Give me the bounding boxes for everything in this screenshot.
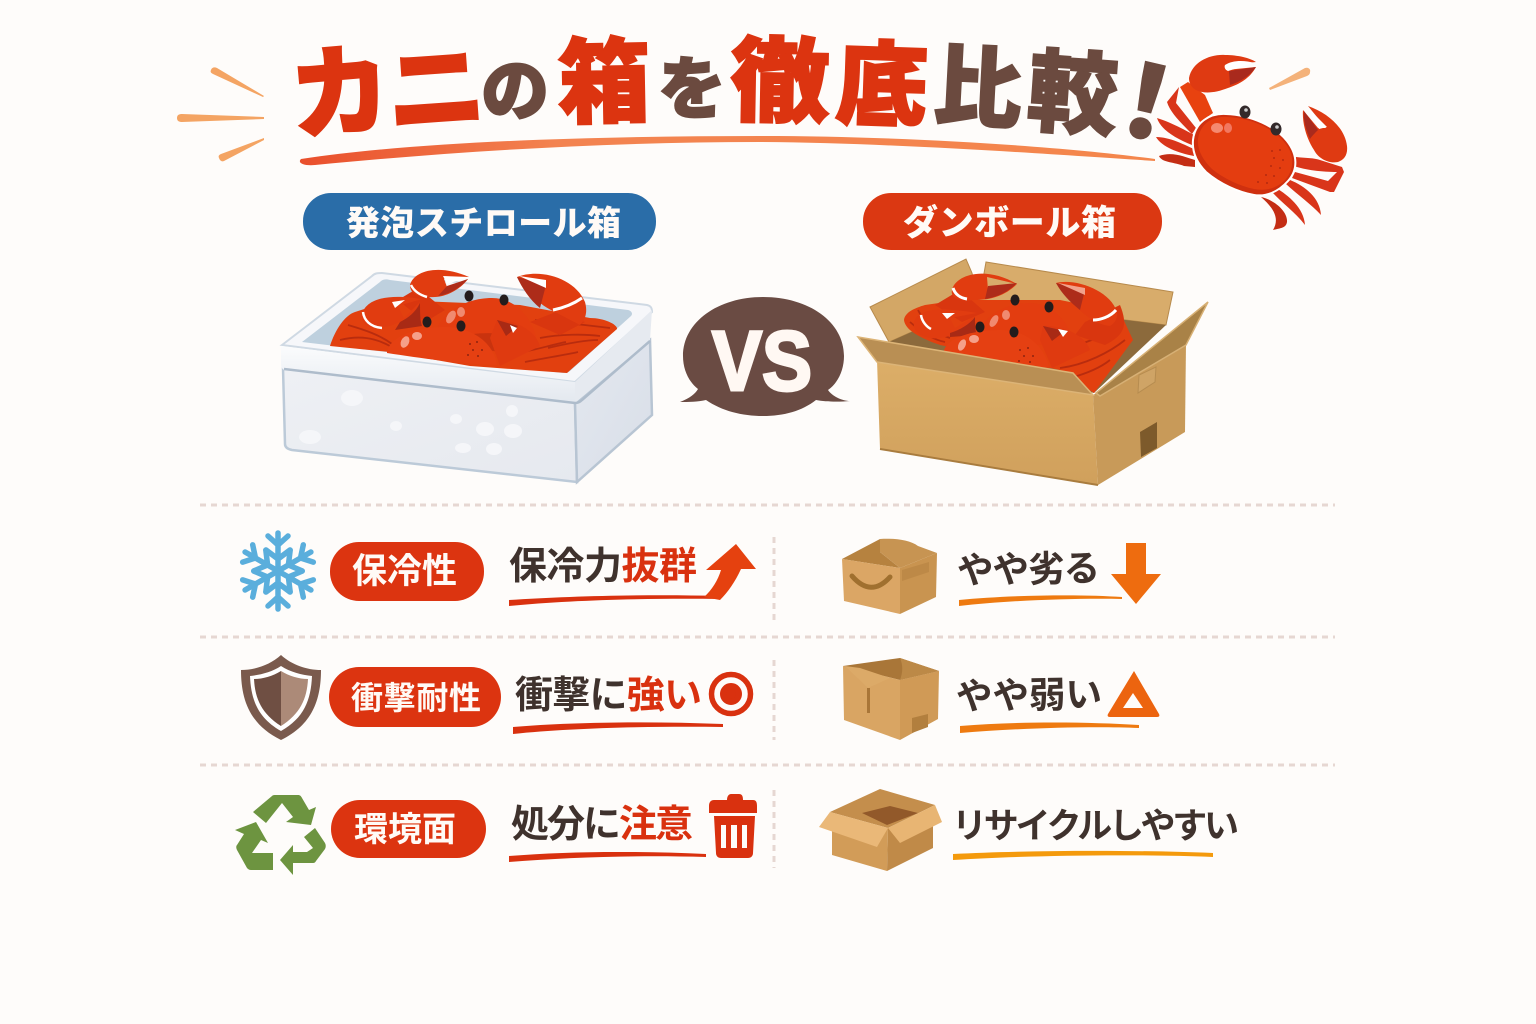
back crab [433, 290, 537, 352]
result: foam environment [509, 804, 706, 862]
result: foam cold retention: 保冷力抜群 [509, 546, 697, 588]
label pill: environment [331, 800, 486, 858]
title underline swoosh [300, 136, 1155, 165]
title: を [658, 52, 726, 128]
icon: up arrow [704, 544, 756, 600]
crab left legs [1156, 118, 1196, 167]
title: 較 [1024, 43, 1121, 149]
VS speech bubble [680, 297, 850, 416]
decorative burst line right of title [1269, 68, 1310, 90]
front crab [387, 316, 540, 366]
mid left claw [362, 297, 422, 330]
icon: shield [241, 655, 321, 740]
pile of crabs in cardboard box [904, 274, 1133, 393]
front crab [944, 322, 1090, 368]
title [286, 31, 1207, 170]
title: 徹 [729, 31, 831, 135]
header pill: foam box: 発泡スチロール箱 [346, 205, 621, 243]
icon: dented cardboard box [843, 658, 939, 740]
label pill: impact resistance [329, 667, 501, 727]
illustration: cardboard box with crabs [858, 259, 1208, 485]
crab left claw [1189, 55, 1256, 92]
crab body [1193, 114, 1295, 195]
result: cardboard impact resistance: やや弱い [956, 674, 1102, 717]
cardboard right face [1093, 343, 1186, 485]
result: cardboard environment: リサイクルしやすい [952, 807, 1239, 846]
icon: double circle [712, 674, 750, 714]
title: ！ [1085, 38, 1207, 170]
title: 底 [834, 34, 930, 140]
result: foam impact resistance: 衝撃に強い [515, 675, 702, 717]
crab lower legs [1261, 180, 1321, 230]
foam box body [283, 340, 652, 482]
crab right claw and arm [1292, 106, 1347, 192]
icon: down arrow [1111, 543, 1161, 604]
cardboard front face [877, 360, 1098, 485]
icon: open cardboard box [819, 789, 942, 871]
label pill: environment: 環境面 [354, 811, 456, 849]
icon: recycle [235, 795, 326, 875]
result: cardboard cold retention [957, 548, 1122, 606]
title: 箱 [557, 32, 651, 136]
foam box lid [281, 273, 652, 403]
back crab [977, 294, 1071, 345]
result: foam impact resistance [513, 675, 723, 734]
title: 比 [931, 37, 1024, 140]
icon: crab mascot [1156, 55, 1347, 230]
result: foam environment: 処分に注意 [511, 804, 693, 846]
title: の [480, 53, 550, 131]
illustration: foam box with crabs [281, 270, 652, 482]
back flaps [870, 259, 1173, 393]
mid left claw [914, 310, 977, 338]
cardboard front flap [858, 337, 1093, 395]
icon: triangle [1108, 671, 1159, 717]
result: foam cold retention [509, 546, 720, 606]
result: cardboard impact resistance [956, 674, 1139, 733]
left crab claw top [398, 270, 469, 322]
icon: snowflake [239, 533, 317, 609]
VS speech bubble: VS [712, 314, 812, 408]
title: ニ [383, 32, 489, 148]
top right claw [1056, 282, 1124, 345]
right crab claw top [517, 274, 586, 335]
crab eyes [1240, 106, 1282, 136]
row dividers [200, 505, 1335, 868]
header pill: cardboard box [863, 193, 1162, 250]
result: cardboard cold retention: やや劣る [957, 548, 1100, 591]
top left claw [935, 274, 1017, 322]
title: カ [286, 34, 395, 154]
crab shell speckles [1257, 149, 1284, 184]
pile of crabs in foam box [330, 270, 617, 373]
crab left arm [1167, 82, 1213, 134]
label pill: impact resistance: 衝撃耐性 [351, 680, 481, 716]
header pill: foam box [303, 193, 656, 250]
label pill: cold retention [330, 542, 484, 601]
decorative burst lines left of title [177, 67, 264, 161]
header pill: cardboard box: ダンボール箱 [903, 203, 1116, 243]
icon: weak cardboard box [842, 539, 937, 614]
icon: trash can [709, 794, 757, 858]
label pill: cold retention: 保冷性 [352, 552, 457, 591]
cardboard right flap [1096, 302, 1208, 396]
